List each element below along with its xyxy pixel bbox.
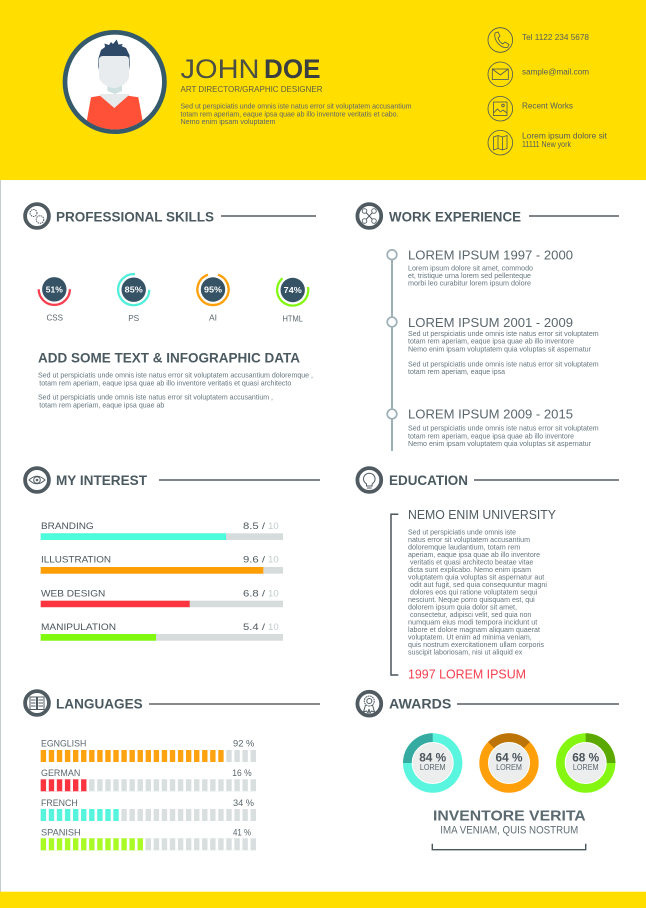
- heading: professional skills: PROFESSIONAL SKILLS: [56, 209, 214, 224]
- education text: aperiam, eaque ipsa quae ab illo inventore: [408, 550, 540, 559]
- donut chart: 68%: 68 %: [572, 751, 600, 765]
- language bar: french: FRENCH: [41, 798, 78, 808]
- header band: [0, 0, 646, 180]
- language bar: french: 34 %: [233, 798, 254, 808]
- education text: Sed ut perspiciatis unde omnis iste: [408, 528, 516, 537]
- contact: address: Lorem ipsum dolore sit: [522, 131, 608, 141]
- avatar portrait: [65, 32, 164, 135]
- skill ring: PS: 85%: [125, 285, 143, 295]
- award bracket: [432, 844, 586, 850]
- skill ring: HTML: [277, 278, 308, 324]
- education text: quis nostrum exercitationem ullam corporis: [408, 640, 544, 649]
- interest bar: illustration: 10: [268, 555, 279, 566]
- university name: NEMO ENIM UNIVERSITY: [408, 508, 557, 522]
- name title: DOE: [264, 54, 320, 84]
- education text: doloremque laudantium, totam rem: [408, 543, 520, 552]
- donut chart: 64%: LOREM: [496, 763, 522, 772]
- language bar: german: 16 %: [232, 768, 252, 778]
- contact: email: [488, 62, 589, 87]
- education text: nesciunt. Neque porro quisquam est, qui: [408, 595, 535, 604]
- donut chart: 64%: [479, 733, 539, 793]
- donut chart: 68%: LOREM: [573, 763, 599, 772]
- heading: my interest: MY INTEREST: [56, 473, 148, 488]
- education text: voluptatem quia voluptas sit aspernatur aut: [408, 573, 544, 582]
- interest bar: illustration: ILLUSTRATION: [41, 555, 111, 566]
- language bar: english: EGNGLISH: [41, 738, 86, 748]
- contact: phone: [488, 28, 589, 52]
- skill ring: CSS: 51%: [46, 284, 63, 294]
- job entry 2001-2009: totam rem aperiam, eaque ipsa quae ab illo inventore: [408, 337, 574, 346]
- donut chart: 68%: [556, 733, 615, 793]
- interest bar: manipulation: 10: [268, 622, 279, 633]
- job entry 2009-2015: Nemo enim ipsam voluptatem quia voluptas sit aspernatur: [408, 439, 592, 448]
- donut chart: 84%: [403, 733, 462, 793]
- award subtitle: IMA VENIAM, QUIS NOSTRUM: [440, 824, 578, 836]
- interest bar: illustration: [41, 555, 283, 574]
- language bar: french: [41, 798, 256, 821]
- heading: awards: AWARDS: [389, 696, 451, 711]
- job entry 2001-2009: Sed ut perspiciatis unde omnis iste natus error sit voluptatem: [408, 359, 599, 368]
- skill ring: AI: AI: [209, 312, 217, 322]
- infographic data text: totam rem aperiam, eaque ipsa quae ab: [39, 400, 164, 409]
- contact: phone: Tel 1122 234 5678: [522, 32, 589, 42]
- intro text: Sed ut perspiciatis unde omnis iste natus error sit voluptatem accusantium: [180, 102, 412, 111]
- infographic data text: Sed ut perspiciatis unde omnis iste natus error sit voluptatem accusantium ,: [38, 392, 273, 401]
- donut chart: 64%: 64 %: [496, 751, 523, 765]
- education text: dolorem ipsum quia dolor sit amet,: [408, 603, 517, 612]
- interest bar: manipulation: [41, 622, 283, 641]
- donut chart: 84%: LOREM: [420, 763, 446, 772]
- job entry 2001-2009: [408, 315, 599, 376]
- education text: veritatis et quasi architecto beatae vitae: [410, 558, 533, 567]
- skill ring: PS: [118, 274, 149, 323]
- job entry 2009-2015: [408, 407, 599, 448]
- job entry 2009-2015: Sed ut perspiciatis unde omnis iste natus error sit voluptatem: [408, 424, 599, 433]
- heading: languages: [25, 691, 320, 715]
- education text: dicta sunt explicabo. Nemo enim ipsam: [408, 565, 531, 574]
- skill ring: HTML: HTML: [282, 314, 303, 324]
- education bracket: [391, 514, 398, 675]
- interest bar: web design: WEB DESIGN: [41, 588, 105, 599]
- language bar: spanish: [41, 827, 256, 850]
- interest bar: web design: [41, 588, 283, 607]
- education text: numquam eius modi tempora incidunt ut: [408, 618, 537, 627]
- heading: awards: [357, 692, 619, 716]
- job entry 2001-2009: LOREM IPSUM 2001 - 2009: [408, 315, 573, 330]
- interest bar: branding: 10: [268, 521, 279, 532]
- interest bar: manipulation: 5.4 /: [243, 622, 265, 633]
- infographic data text: Sed ut perspiciatis unde omnis iste natus error sit voluptatem accusantium doloremque ,: [38, 370, 313, 379]
- skill ring: HTML: 74%: [284, 285, 302, 295]
- donut chart: 84%: 84 %: [419, 751, 447, 765]
- job entry 1997-2000: [408, 247, 573, 288]
- heading: education: [357, 468, 619, 492]
- infographic data text: [38, 370, 313, 409]
- education date: 1997 LOREM IPSUM: [408, 667, 526, 682]
- education text: suscipit laboriosam, nisi ut aliquid ex: [408, 648, 523, 657]
- contact: email: sample@mail.com: [522, 66, 589, 76]
- infographic data heading: ADD SOME TEXT & INFOGRAPHIC DATA: [38, 350, 300, 366]
- heading: professional skills: [25, 204, 316, 228]
- interest bar: branding: 8.5 /: [243, 521, 265, 532]
- language bar: english: 92 %: [233, 738, 254, 748]
- language bar: spanish: SPANISH: [41, 827, 81, 837]
- job entry 2001-2009: Nemo enim ipsam voluptatem quia voluptas sit aspernatur: [408, 344, 592, 353]
- intro text: [180, 102, 412, 126]
- education text: natus error sit voluptatem accusantium: [408, 535, 530, 544]
- education text: voluptatem. Ut enim ad minima veniam,: [408, 633, 532, 642]
- interest bar: web design: 10: [268, 588, 279, 599]
- job entry 2009-2015: totam rem aperiam, eaque ipsa quae ab illo inventore: [408, 431, 574, 440]
- heading: work experience: WORK EXPERIENCE: [389, 209, 521, 224]
- name title: [180, 54, 320, 84]
- language bar: german: [41, 768, 256, 791]
- job entry 2001-2009: Sed ut perspiciatis unde omnis iste natus error sit voluptatem: [408, 329, 599, 338]
- job role: ART DIRECTOR/GRAPHIC DESIGNER: [180, 84, 322, 94]
- contact: address: [488, 130, 608, 155]
- contact: recent works: [488, 96, 573, 121]
- intro text: totam rem aperiam, eaque ipsa quae ab illo inventore veritatis et cabo.: [180, 109, 398, 118]
- interest bar: branding: BRANDING: [41, 521, 94, 532]
- intro text: Nemo enim ipsam voluptatem: [180, 117, 276, 126]
- heading: languages: LANGUAGES: [56, 696, 143, 711]
- job entry 2009-2015: LOREM IPSUM 2009 - 2015: [408, 407, 573, 422]
- timeline: [387, 250, 397, 451]
- job entry 1997-2000: Lorem ipsum dolore sit amet, commodo: [408, 264, 533, 273]
- interest bar: web design: 6.8 /: [243, 588, 265, 599]
- education text: labore et dolore magnam aliquam quaerat: [408, 625, 540, 634]
- name title: JOHN: [180, 54, 260, 84]
- interest bar: illustration: 9.6 /: [243, 555, 265, 566]
- education text: [408, 528, 547, 657]
- award title: INVENTORE VERITA: [433, 807, 586, 824]
- skill ring: AI: [197, 275, 229, 322]
- language bar: german: GERMAN: [41, 768, 80, 778]
- language bar: english: [41, 738, 256, 762]
- heading: work experience: [357, 204, 619, 228]
- job entry 2001-2009: totam rem aperiam, eaque ipsa: [408, 367, 506, 376]
- interest bar: branding: [41, 521, 283, 540]
- language bar: spanish: 41 %: [233, 827, 251, 837]
- job entry 1997-2000: morbi leo curabitur lorem ipsum dolore: [408, 279, 531, 288]
- heading: education: EDUCATION: [389, 473, 468, 488]
- heading: my interest: [25, 468, 320, 492]
- job entry 1997-2000: LOREM IPSUM 1997 - 2000: [408, 247, 573, 262]
- interest bar: manipulation: MANIPULATION: [41, 622, 116, 633]
- skill ring: CSS: CSS: [46, 312, 63, 322]
- education text: dolores eos qui ratione voluptatem sequi: [410, 588, 538, 597]
- education text: odit aut fugit, sed quia consequuntur magni: [410, 580, 547, 589]
- infographic data text: totam rem aperiam, eaque ipsa quae ab illo inventore veritatis et quasi architecto: [39, 378, 291, 387]
- skill ring: PS: PS: [128, 313, 140, 323]
- contact: address: 11111 New york: [522, 139, 572, 149]
- job entry 1997-2000: et, tristique urna lorem sed pellenteque: [408, 271, 531, 280]
- skill ring: AI: 95%: [204, 284, 222, 294]
- contact: recent works: Recent Works: [522, 101, 573, 111]
- education text: consectetur, adipisci velit, sed quia non: [410, 610, 531, 619]
- footer band: [0, 892, 646, 908]
- skill ring: CSS: [39, 277, 70, 322]
